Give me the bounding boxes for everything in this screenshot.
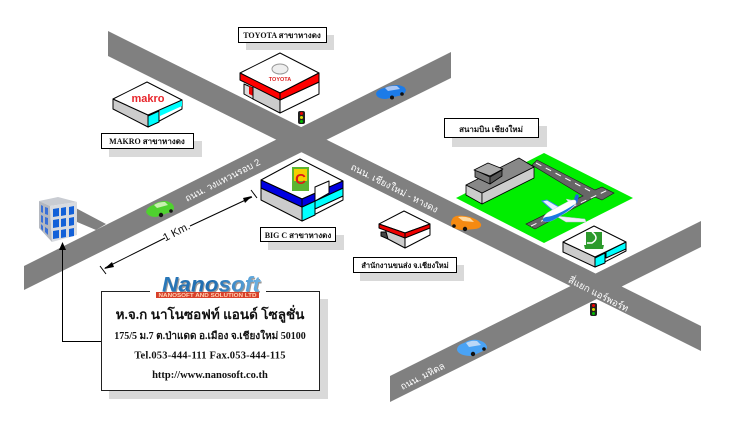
label: airport bbox=[444, 118, 547, 147]
runway bbox=[526, 160, 614, 229]
distance arrow: 1 Km: 1 Km. bbox=[161, 220, 192, 244]
address box: Tel.053-444-111 Fax.053-444-115 bbox=[134, 350, 286, 362]
label: Makro bbox=[102, 134, 202, 157]
building: Big C: C bbox=[295, 171, 306, 188]
address box bbox=[102, 292, 328, 399]
address box: ห.จ.ก นาโนซอฟท์ แอนด์ โซลูชั่น bbox=[116, 304, 305, 323]
road label: Mahidol: ถนน. มหิดล bbox=[399, 361, 447, 393]
roads network bbox=[24, 31, 701, 402]
distance arrow: 1 Km bbox=[100, 190, 257, 274]
road label: ring road: ถนน. วงแหวนรอบ 2 bbox=[183, 157, 262, 205]
icon: light blue car bbox=[457, 340, 487, 356]
building: transport office bbox=[379, 211, 430, 248]
logo: Nanosoft: Nanosoft bbox=[163, 275, 262, 298]
building: Makro: makro bbox=[131, 93, 165, 105]
label: Makro: MAKRO สาขาหางดง bbox=[109, 137, 185, 146]
label: Toyota: TOYOTA สาขาหางดง bbox=[243, 31, 321, 40]
building: green logo bbox=[563, 226, 626, 267]
airport bbox=[456, 153, 633, 243]
label: Toyota bbox=[238, 28, 334, 50]
building: Toyota bbox=[240, 53, 319, 113]
icon: blue car bbox=[376, 85, 406, 100]
label: transport office bbox=[354, 258, 464, 281]
plane bbox=[542, 194, 586, 222]
icon: orange car bbox=[451, 216, 481, 231]
terminal bbox=[466, 158, 534, 204]
label: airport: สนามบิน เชียงใหม่ bbox=[459, 124, 523, 134]
building: Big C bbox=[261, 159, 343, 221]
road label: airport intersection: สี่แยก แอร์พอร์ท bbox=[566, 273, 631, 315]
label: Big C bbox=[260, 228, 344, 250]
address box: http://www.nanosoft.co.th bbox=[152, 370, 268, 381]
address box: 175/5 ม.7 ต.ป่าแดด อ.เมือง จ.เชียงใหม่ 50100 bbox=[114, 329, 306, 342]
label: Big C: BIG C สาขาหางดง bbox=[265, 231, 331, 240]
icon: office building bbox=[39, 197, 77, 242]
arrow: box to building bbox=[59, 242, 101, 342]
logo: Nanosoft: Nanosoft bbox=[162, 274, 261, 296]
logo: Nanosoft: NANOSOFT AND SOLUTION LTD bbox=[158, 293, 257, 299]
building: Toyota: TOYOTA bbox=[269, 77, 291, 83]
building: Makro bbox=[113, 82, 182, 127]
icon: traffic light south bbox=[590, 303, 597, 316]
road label: Chiang Mai - Hang Dong: ถนน. เชียงใหม่ - หางดง bbox=[349, 161, 440, 216]
icon: traffic light north bbox=[298, 111, 305, 124]
label: transport office: สำนักงานขนส่ง จ.เชียงใหม่ bbox=[361, 261, 449, 270]
icon: green car bbox=[146, 201, 174, 217]
